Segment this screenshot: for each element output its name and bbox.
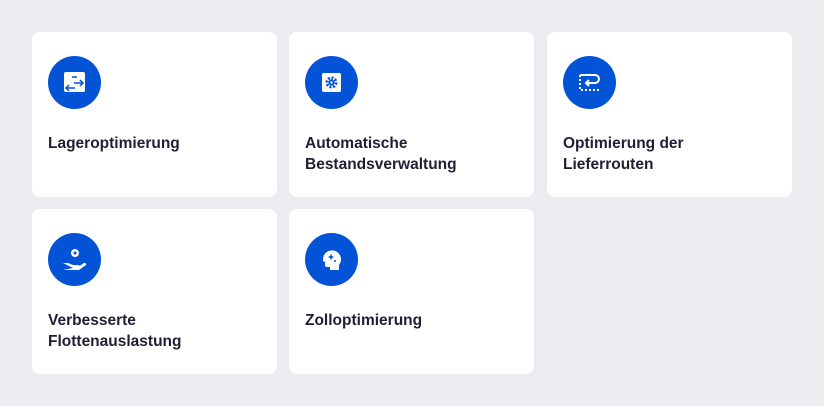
icon: hand with gear [48, 233, 101, 286]
icon: head with sparkle [305, 233, 358, 286]
title: Automatische [305, 135, 408, 152]
title [305, 135, 457, 173]
icon: route [563, 56, 616, 109]
title: Bestandsverwaltung [305, 156, 457, 173]
card: Optimierung der Lieferrouten [547, 32, 792, 197]
icon: warehouse arrows [48, 56, 101, 109]
card: Lageroptimierung [32, 32, 277, 197]
title: Zolloptimierung [305, 312, 422, 329]
title: Verbesserte [48, 312, 136, 329]
title [48, 312, 181, 350]
card: Verbesserte Flottenauslastung [32, 209, 277, 374]
title: Optimierung der [563, 135, 684, 152]
title: Lageroptimierung [48, 135, 180, 152]
title: Lieferrouten [563, 156, 653, 173]
title [563, 135, 684, 173]
icon: gear box [305, 56, 358, 109]
card: Automatische Bestandsverwaltung [289, 32, 534, 197]
title: Flottenauslastung [48, 333, 181, 350]
card: Zolloptimierung [289, 209, 534, 374]
